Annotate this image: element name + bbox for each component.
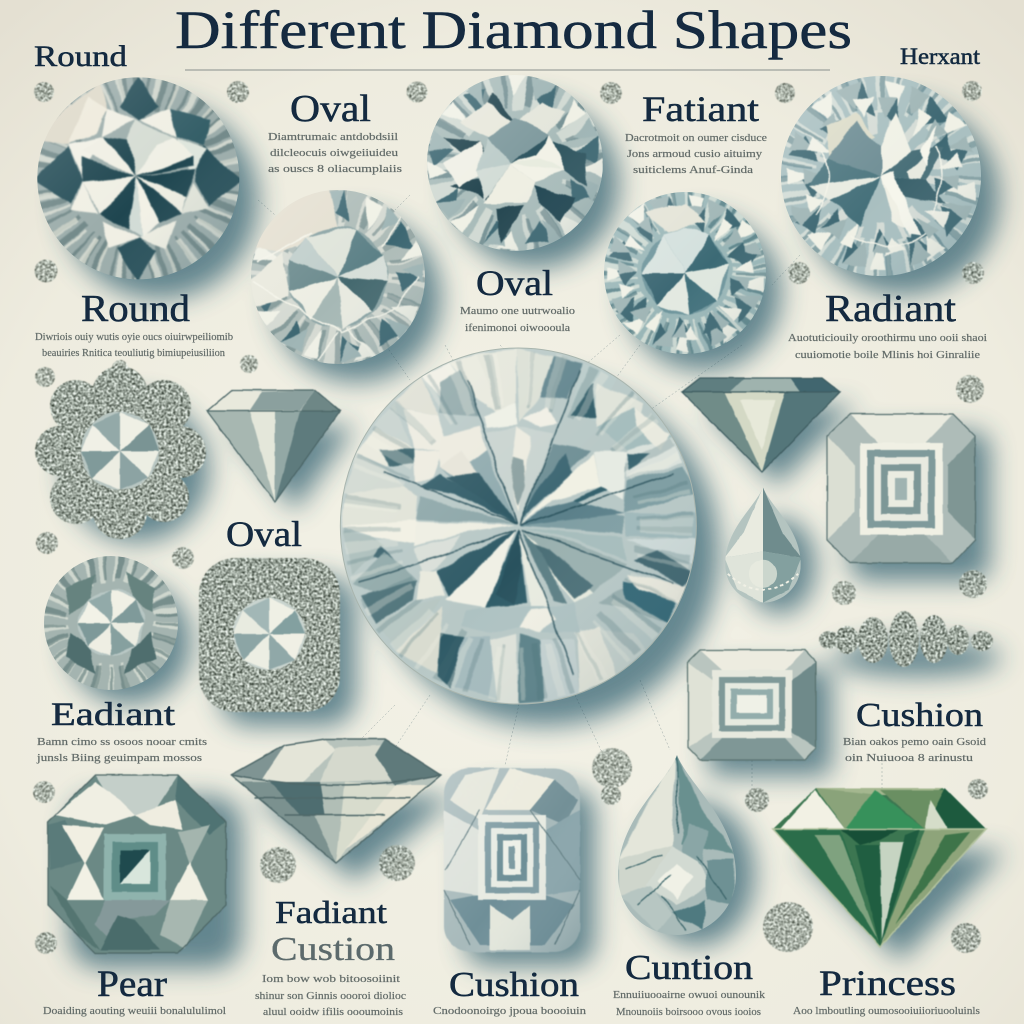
text: Oval description: Diamtrumaic antdobdsiil [268,132,398,143]
label: Custion: Custion [271,931,395,968]
label: Fadiant: Fadiant [275,894,387,930]
text: Oval description [268,132,402,175]
diamond: bar of ovals [819,611,993,667]
label: Herxant top right: Herxant [900,44,981,69]
diamond: octagon green-grey [48,775,226,953]
text: Fatiant description: suiticlems Anuf-Ginda [633,165,753,176]
text: Pear description: Doaiding aouting weuiii bonalululimol [43,1006,226,1017]
text: Radiant description: Auotuticiouily oroothirmu uno ooii shaoi [788,333,987,344]
label: Oval first: Oval [290,88,371,130]
text: Eadiant description [36,737,207,764]
connector lines [258,120,882,790]
text: Radiant description [788,333,987,361]
text: Cushion description: oin Nuiuooa 8 arinustu [845,753,974,764]
label: Pear: Pear [97,964,167,1005]
text: Oval description: as ouscs 8 oliacumplaiis [268,164,402,175]
label: Eadiant: Eadiant [51,697,175,733]
diamond: halo cushion [199,558,340,712]
diamond: triangle side view [207,390,340,502]
label: Cuntion: Cuntion [625,948,753,987]
diamond: green side view [773,788,986,947]
diamond: round star cut top left [37,77,240,280]
text: Cushion description [843,737,987,764]
diamond: side view brilliant [231,739,441,863]
title: Different Diamond Shapes [175,0,852,60]
text: Fadiant Custion description: shinur son Ginnis oooroi diolioc [255,991,406,1002]
text: Oval centre description: ifenimonoi oiwoooula [465,323,570,334]
text: Cuntion description: Ennuiiuooairne owuoi ounounik [613,990,766,1001]
text: Round description: Diwriois ouiy wutis oyie oucs oiuirwpeiliomib [35,332,233,343]
diamond: round cut top centre [427,75,603,251]
diamond: large central round brilliant [340,348,697,704]
diamond: radiant square right [827,414,975,563]
text: Fatiant description: Dacrotmoit on oumer cisduce [625,133,767,144]
diamond: brilliant round top right [781,76,981,276]
label: Round top left: Round [34,40,127,73]
label: Cushion bottom: Cushion [449,965,579,1004]
label: Fatiant: Fatiant [642,89,759,129]
text: Cuntion description: Mnounoiis boirsooo ovous iooios [616,1007,761,1018]
diamond: emerald cushion [444,768,580,952]
text: Cushion bottom description: Cnodoonoirgo jpoua boooiuin [433,1006,587,1017]
text: Fadiant Custion description: Iom bow wob bitoosoiinit [262,974,400,985]
diamond: brilliant round right of centre [604,192,766,354]
text: Cuntion description [613,990,766,1018]
text: Round description: beauiries Rnitica teouliutig bimiupeiusiliion [42,348,226,359]
label: Oval centre: Oval [476,263,553,303]
text: Fadiant Custion description [255,974,406,1018]
text: Oval centre description: Maumo one uutrwoalio [460,306,575,317]
diamond: small pear [726,488,801,602]
text: Round description [35,332,233,359]
diamond: round cut lower left [44,556,178,690]
label: Cushion right: Cushion [856,697,983,734]
text: Eadiant description: Bamn cimo ss osoos nooar cmits [37,737,207,748]
text: Oval centre description [460,306,575,334]
diamond: emerald rectangular [688,650,816,760]
drop shadows [62,100,1005,968]
text: Fatiant description [625,133,767,176]
diamond: large pear [618,755,736,935]
text: Radiant description: cuuiomotie boile Mlinis hoi Ginraliie [795,350,980,361]
label: Princess: Princess [819,963,956,1003]
text: Princess description: Aoo lmboutling oumosooiuiioriuooluinls [793,1006,980,1017]
text: Oval description: dilcleocuis oiwgeiiuideu [270,148,399,159]
label: Oval left: Oval [226,514,302,554]
diamond: trillion top right [682,378,840,472]
text: Fadiant Custion description: aluul ooidw ifilis oooumoinis [263,1007,403,1018]
label: Round second: Round [81,288,190,330]
text: Eadiant description: junsls Biing geuimpam mossos [36,753,202,764]
label: Radiant: Radiant [825,288,956,330]
small melee diamonds [33,81,988,954]
diamond: round cut second [251,190,425,364]
text: Cushion description: Bian oakos pemo oain Gsoid [843,737,987,748]
text: Fatiant description: Jons armoud cusio aituimy [627,149,763,160]
diamond: flower halo cluster [35,366,206,539]
